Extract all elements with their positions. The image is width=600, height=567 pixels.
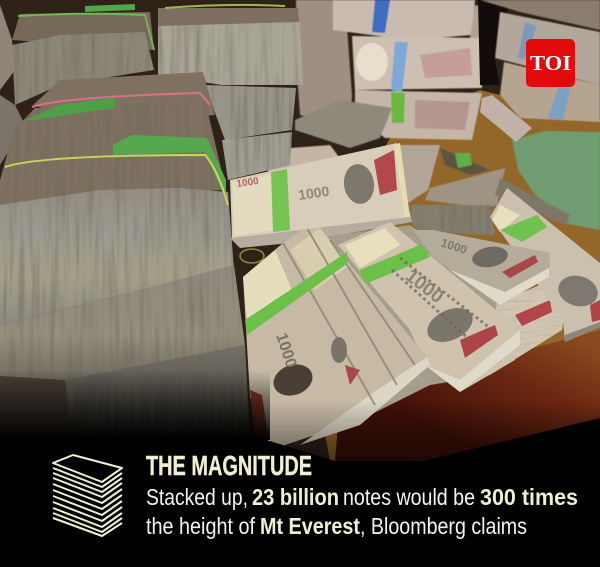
wooden table lower red [335,330,600,461]
fade to black right [270,400,600,462]
fade to black left [0,370,270,440]
lower small note [490,285,565,373]
left fanned note bundle: 1000 [272,331,299,370]
text block: first line [146,484,578,510]
black caption band [0,418,600,567]
text block: first line: 23 billion [252,484,339,510]
text block: first line: Stacked up, [146,484,248,510]
middle back stack [205,85,296,140]
top fallen note: 1000 [297,183,330,203]
text block: second line: the height of [146,513,256,539]
top fallen note: 1000 [236,176,260,190]
middle note bundle: 1000 [439,236,469,257]
middle note bundle [413,230,550,305]
wooden table upper [300,90,600,461]
loose flat notes [265,100,570,235]
logo: TOI [526,39,575,87]
heading: THE MAGNITUDE [146,450,312,481]
text block: second line: , Bloomberg claims [360,513,527,539]
band on upper stacks [18,5,285,50]
fallen stack thickness [230,212,412,248]
logo: TOI: TOI [530,51,571,75]
note edges filling gaps between bundles [300,225,560,420]
central note bundle [338,222,520,392]
big stack front tier 2 [0,265,245,382]
big stack front tier 3 [65,345,250,440]
text block: second line [146,513,527,539]
left edge note [0,5,15,90]
text block: first line: notes would be [343,484,475,510]
icon: stack of notes [53,455,122,536]
green plastic bag [512,131,600,230]
text block: first line: 300 times [480,484,578,510]
big stack front tier 1 [0,188,234,325]
far right stacks [480,0,600,122]
bands on big stack [5,93,228,205]
top fallen note [230,143,410,238]
gap rubber band [240,249,264,263]
text block: second line: Mt Everest [260,513,360,539]
dark gap [478,0,510,85]
upper left stack 2 [158,8,303,85]
white slip on table [480,95,532,142]
top centre stacks of notes [296,0,488,140]
right note bundle [490,188,600,342]
big stack top face [0,72,226,215]
left fanned note bundle [243,225,430,450]
upper left stack 1 [12,12,154,105]
central note bundle: 1000 [401,265,447,308]
